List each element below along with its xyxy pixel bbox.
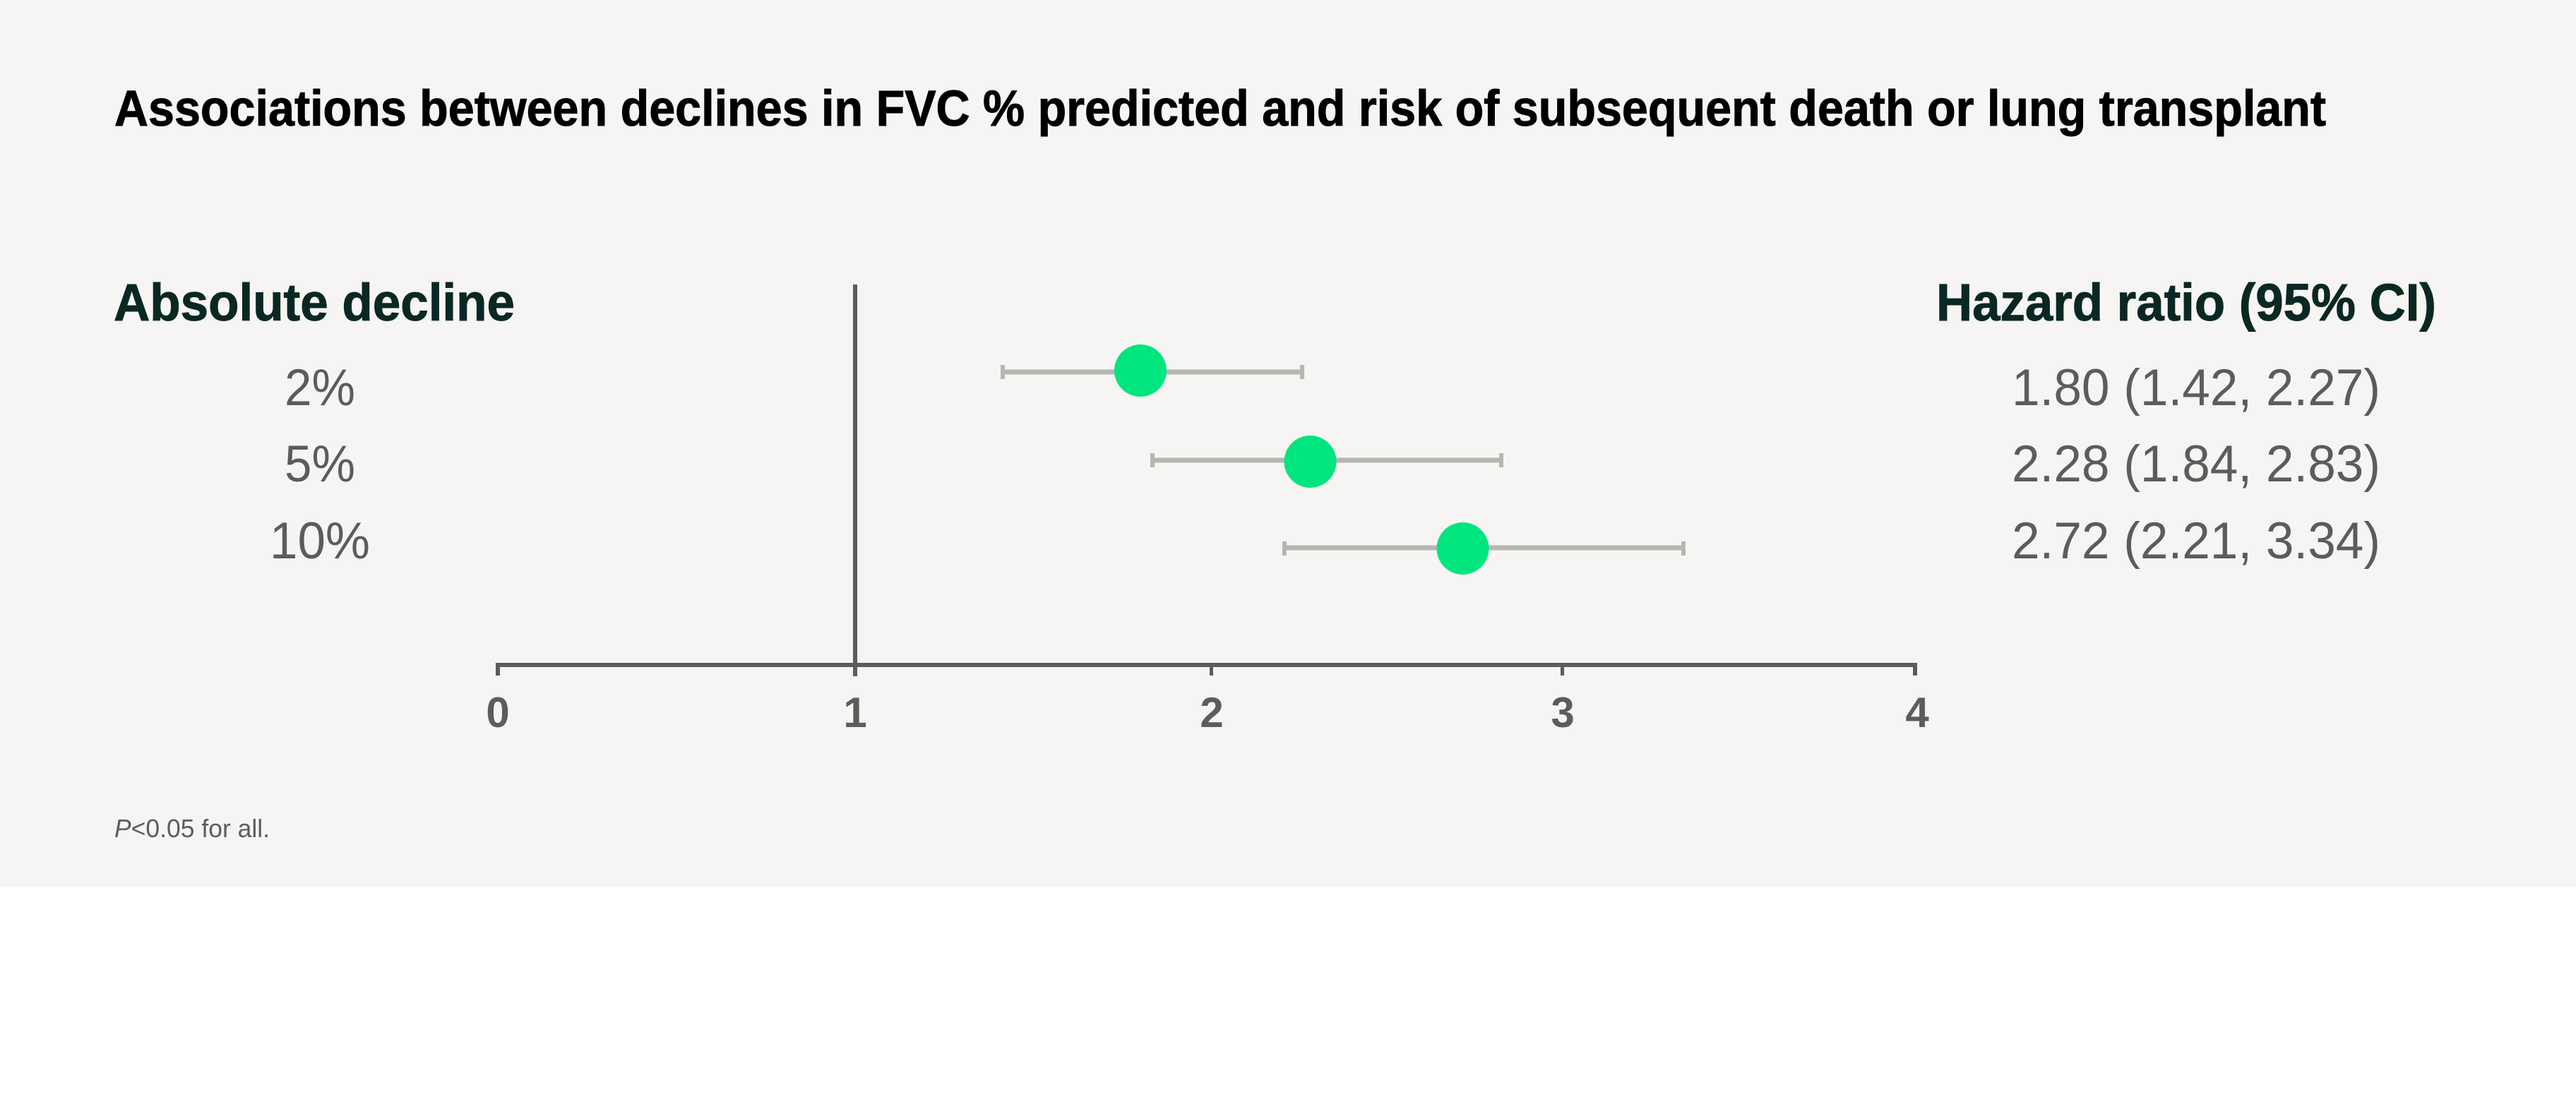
data row: 10% decline bbox=[1282, 522, 1686, 575]
axis tick labels: 3 bbox=[1551, 689, 1575, 736]
axis tick labels: 4 bbox=[1905, 689, 1929, 736]
reference line at hazard ratio 1 bbox=[853, 284, 857, 676]
axis tick labels: 1 bbox=[843, 689, 867, 736]
data row: 2% decline bbox=[1001, 344, 1304, 397]
x axis bbox=[496, 663, 1917, 676]
heading: hazard ratio: Hazard ratio (95% CI) bbox=[1936, 273, 2436, 332]
axis tick labels: 2 bbox=[1200, 689, 1224, 736]
heading: absolute decline: Absolute decline bbox=[114, 273, 515, 332]
label: 10%: 10% bbox=[270, 512, 370, 570]
value: 2% decline: 1.80 (1.42, 2.27) bbox=[2012, 359, 2380, 416]
axis tick labels bbox=[486, 689, 1929, 736]
label: 5%: 5% bbox=[285, 436, 355, 493]
title: Associations between declines in FVC % predicted and risk of subsequent death or lung transplant bbox=[114, 81, 2326, 137]
value: 10% decline: 2.72 (2.21, 3.34) bbox=[2012, 512, 2380, 570]
value: 5% decline: 2.28 (1.84, 2.83) bbox=[2012, 436, 2380, 493]
forest plot bbox=[486, 284, 1929, 736]
column: absolute decline bbox=[114, 273, 515, 570]
column: hazard ratio bbox=[1936, 273, 2436, 570]
label: 2%: 2% bbox=[285, 359, 355, 416]
footnote: P<0.05 for all. bbox=[114, 814, 270, 843]
data row: 5% decline bbox=[1150, 436, 1503, 488]
axis tick labels: 0 bbox=[486, 689, 510, 736]
